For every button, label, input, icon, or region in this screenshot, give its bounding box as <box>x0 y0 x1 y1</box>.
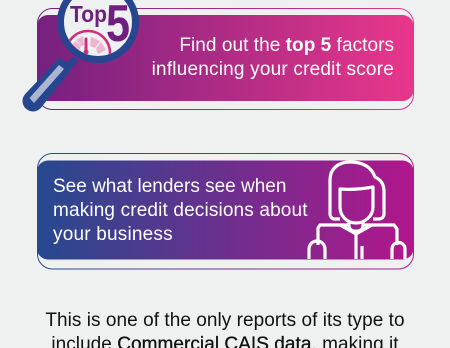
panel 2 text: your business <box>53 224 173 245</box>
panel 2 text: See what lenders see when <box>53 176 286 197</box>
heading: Top: Top <box>70 1 107 27</box>
panel 1 text: influencing your credit score <box>152 58 394 80</box>
panel 2 text: making credit decisions about <box>53 200 308 221</box>
panel 2 text <box>53 176 308 245</box>
text block: report description <box>45 310 405 348</box>
icon: person reading <box>307 160 407 259</box>
panel 1 background <box>37 8 414 110</box>
panel 1 text: Find out the top 5 factors <box>179 35 394 56</box>
text block: report description: This is one of the only reports of its type to <box>45 310 405 330</box>
panel 1 text <box>152 35 394 80</box>
panel: what lenders see <box>37 153 414 270</box>
icon: magnifying glass with top 5 gauge <box>22 0 139 112</box>
panel: top 5 factors <box>22 0 414 112</box>
panel 2 background <box>37 153 414 270</box>
